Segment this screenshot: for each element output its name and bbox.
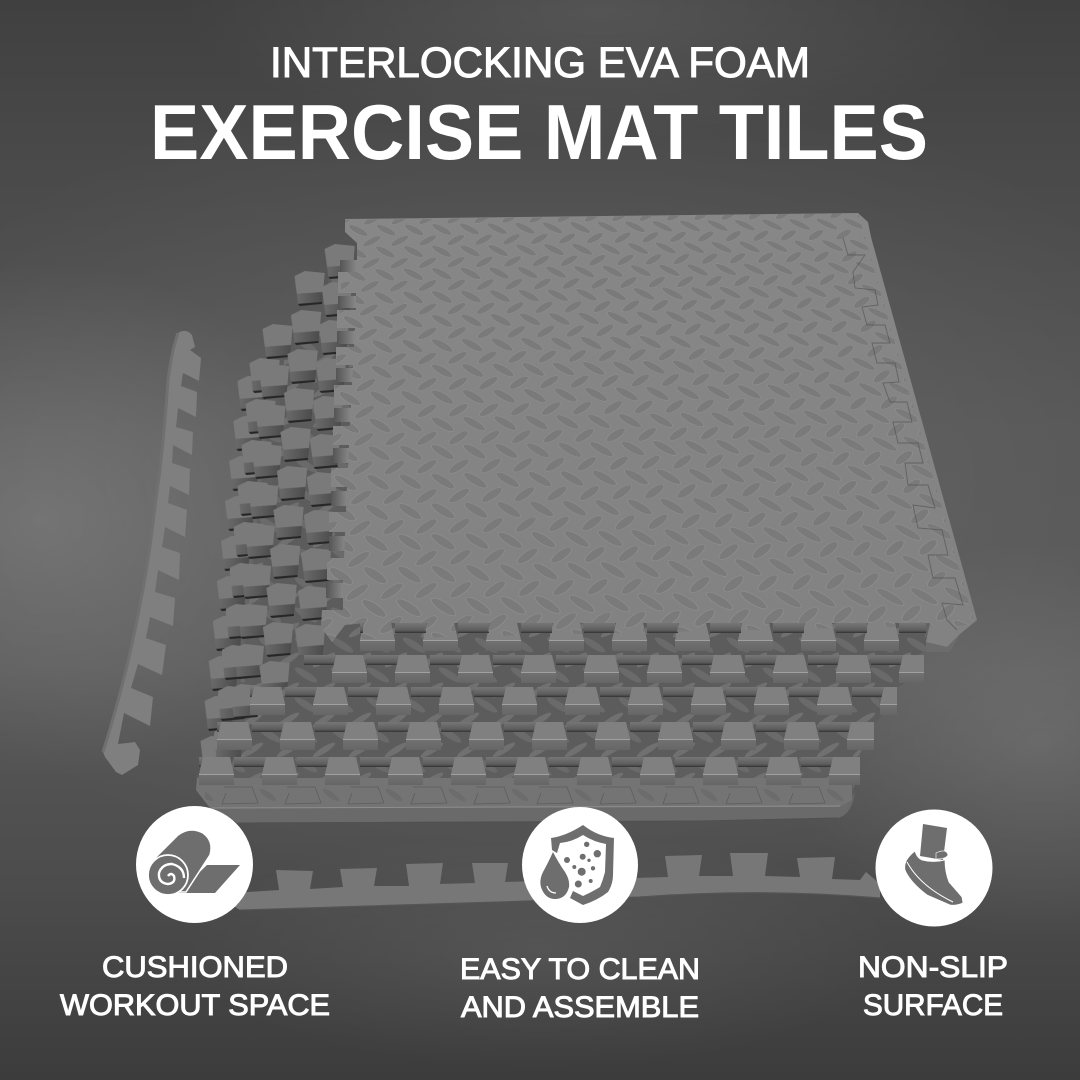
bottom loose border strip bbox=[232, 853, 880, 910]
label: easy to clean and assemble bbox=[460, 953, 700, 1024]
label: non-slip surface: NON-SLIP bbox=[858, 951, 1008, 984]
icon: shield and water drop bbox=[522, 807, 638, 923]
stacked foam tiles bbox=[196, 213, 977, 823]
icon: rolled mat bbox=[136, 806, 253, 923]
label: non-slip surface: SURFACE bbox=[863, 989, 1003, 1022]
layer 2 bbox=[293, 243, 930, 683]
title bbox=[150, 39, 928, 176]
top tile front teeth faces bbox=[360, 623, 926, 651]
top tile notch faces bbox=[326, 260, 358, 598]
label: easy to clean and assemble: AND ASSEMBLE bbox=[461, 991, 699, 1024]
label: cushioned workout space: CUSHIONED bbox=[102, 951, 288, 984]
layer 4 bbox=[217, 300, 882, 750]
layer 6: bottom tile bbox=[196, 300, 855, 823]
label: non-slip surface bbox=[858, 951, 1008, 1022]
icon: shoe bbox=[876, 810, 992, 926]
layer 3 bbox=[250, 270, 908, 715]
label: cushioned workout space bbox=[60, 951, 330, 1022]
main title line: EXERCISE MAT TILES bbox=[150, 88, 928, 176]
seam line on top tile bbox=[843, 238, 963, 630]
label: easy to clean and assemble: EASY TO CLEAN bbox=[460, 953, 700, 986]
layer 5 bbox=[199, 300, 862, 785]
corner piece bbox=[926, 634, 960, 652]
label: cushioned workout space: WORKOUT SPACE bbox=[60, 989, 330, 1022]
left loose border strip bbox=[103, 331, 201, 775]
leaf texture on top tile bbox=[321, 213, 974, 640]
subtitle line: INTERLOCKING EVA FOAM bbox=[270, 39, 810, 87]
top tile body bbox=[321, 213, 977, 647]
